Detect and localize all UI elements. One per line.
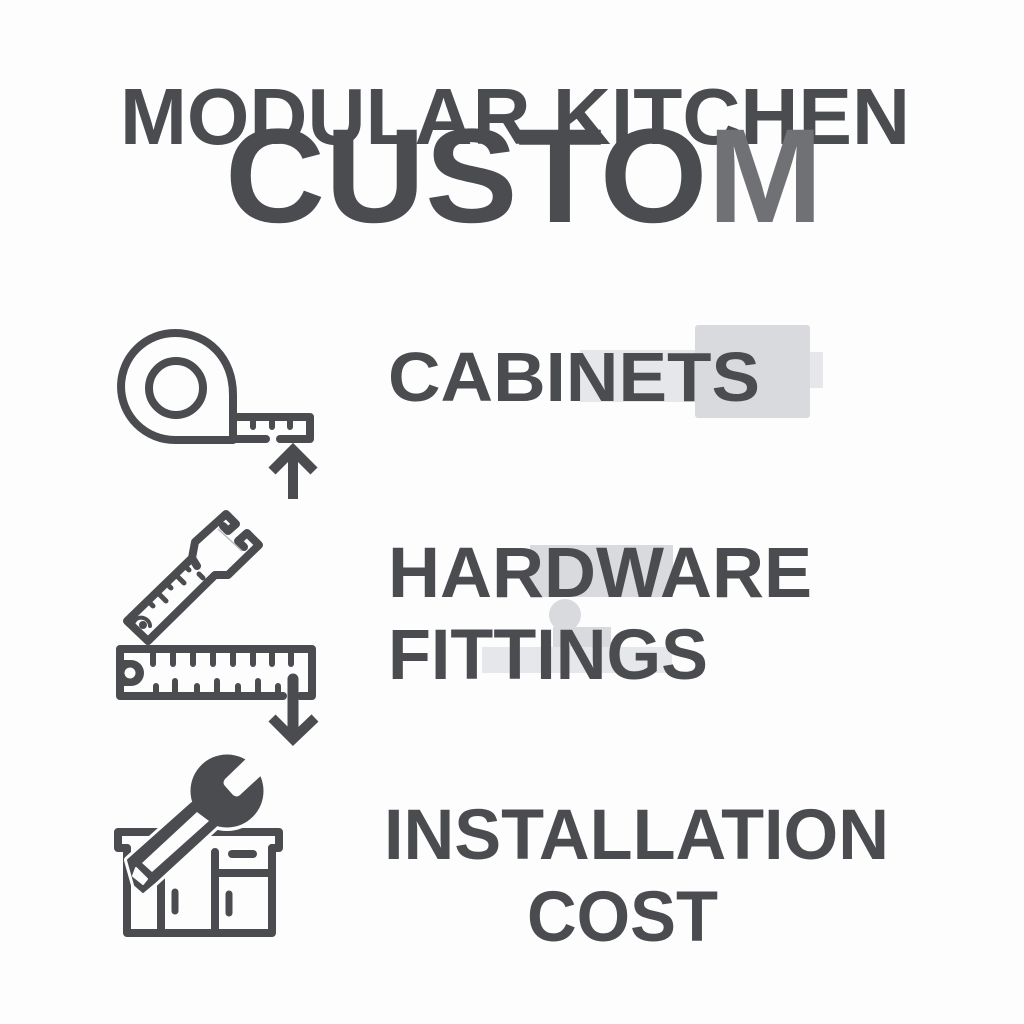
lower ruler — [120, 649, 312, 696]
icon: rulers — [120, 514, 315, 739]
label: installation cost: COST — [527, 878, 718, 957]
label: hardware fittings: FITTINGS — [388, 616, 708, 695]
arrow down — [272, 679, 315, 739]
label: installation cost: INSTALLATION — [384, 796, 889, 875]
cabinet — [118, 832, 279, 933]
title line: modular kitchen: MODULAR KITCHEN — [120, 72, 910, 161]
title line: custom: CUSTOM — [225, 102, 823, 251]
cabinet placeholder block — [580, 325, 823, 418]
label: cabinets: CABINETS — [388, 338, 760, 416]
label: cabinets — [388, 325, 823, 418]
title — [120, 72, 910, 251]
label: hardware fittings — [388, 534, 812, 695]
hardware placeholder shapes — [482, 545, 673, 673]
icon: tape measure — [121, 333, 314, 499]
label: hardware fittings: HARDWARE — [388, 534, 812, 613]
angled ruler — [127, 514, 259, 641]
label: installation cost — [384, 796, 889, 957]
wrench — [128, 751, 267, 892]
icon: wrench and cabinet — [118, 751, 279, 933]
